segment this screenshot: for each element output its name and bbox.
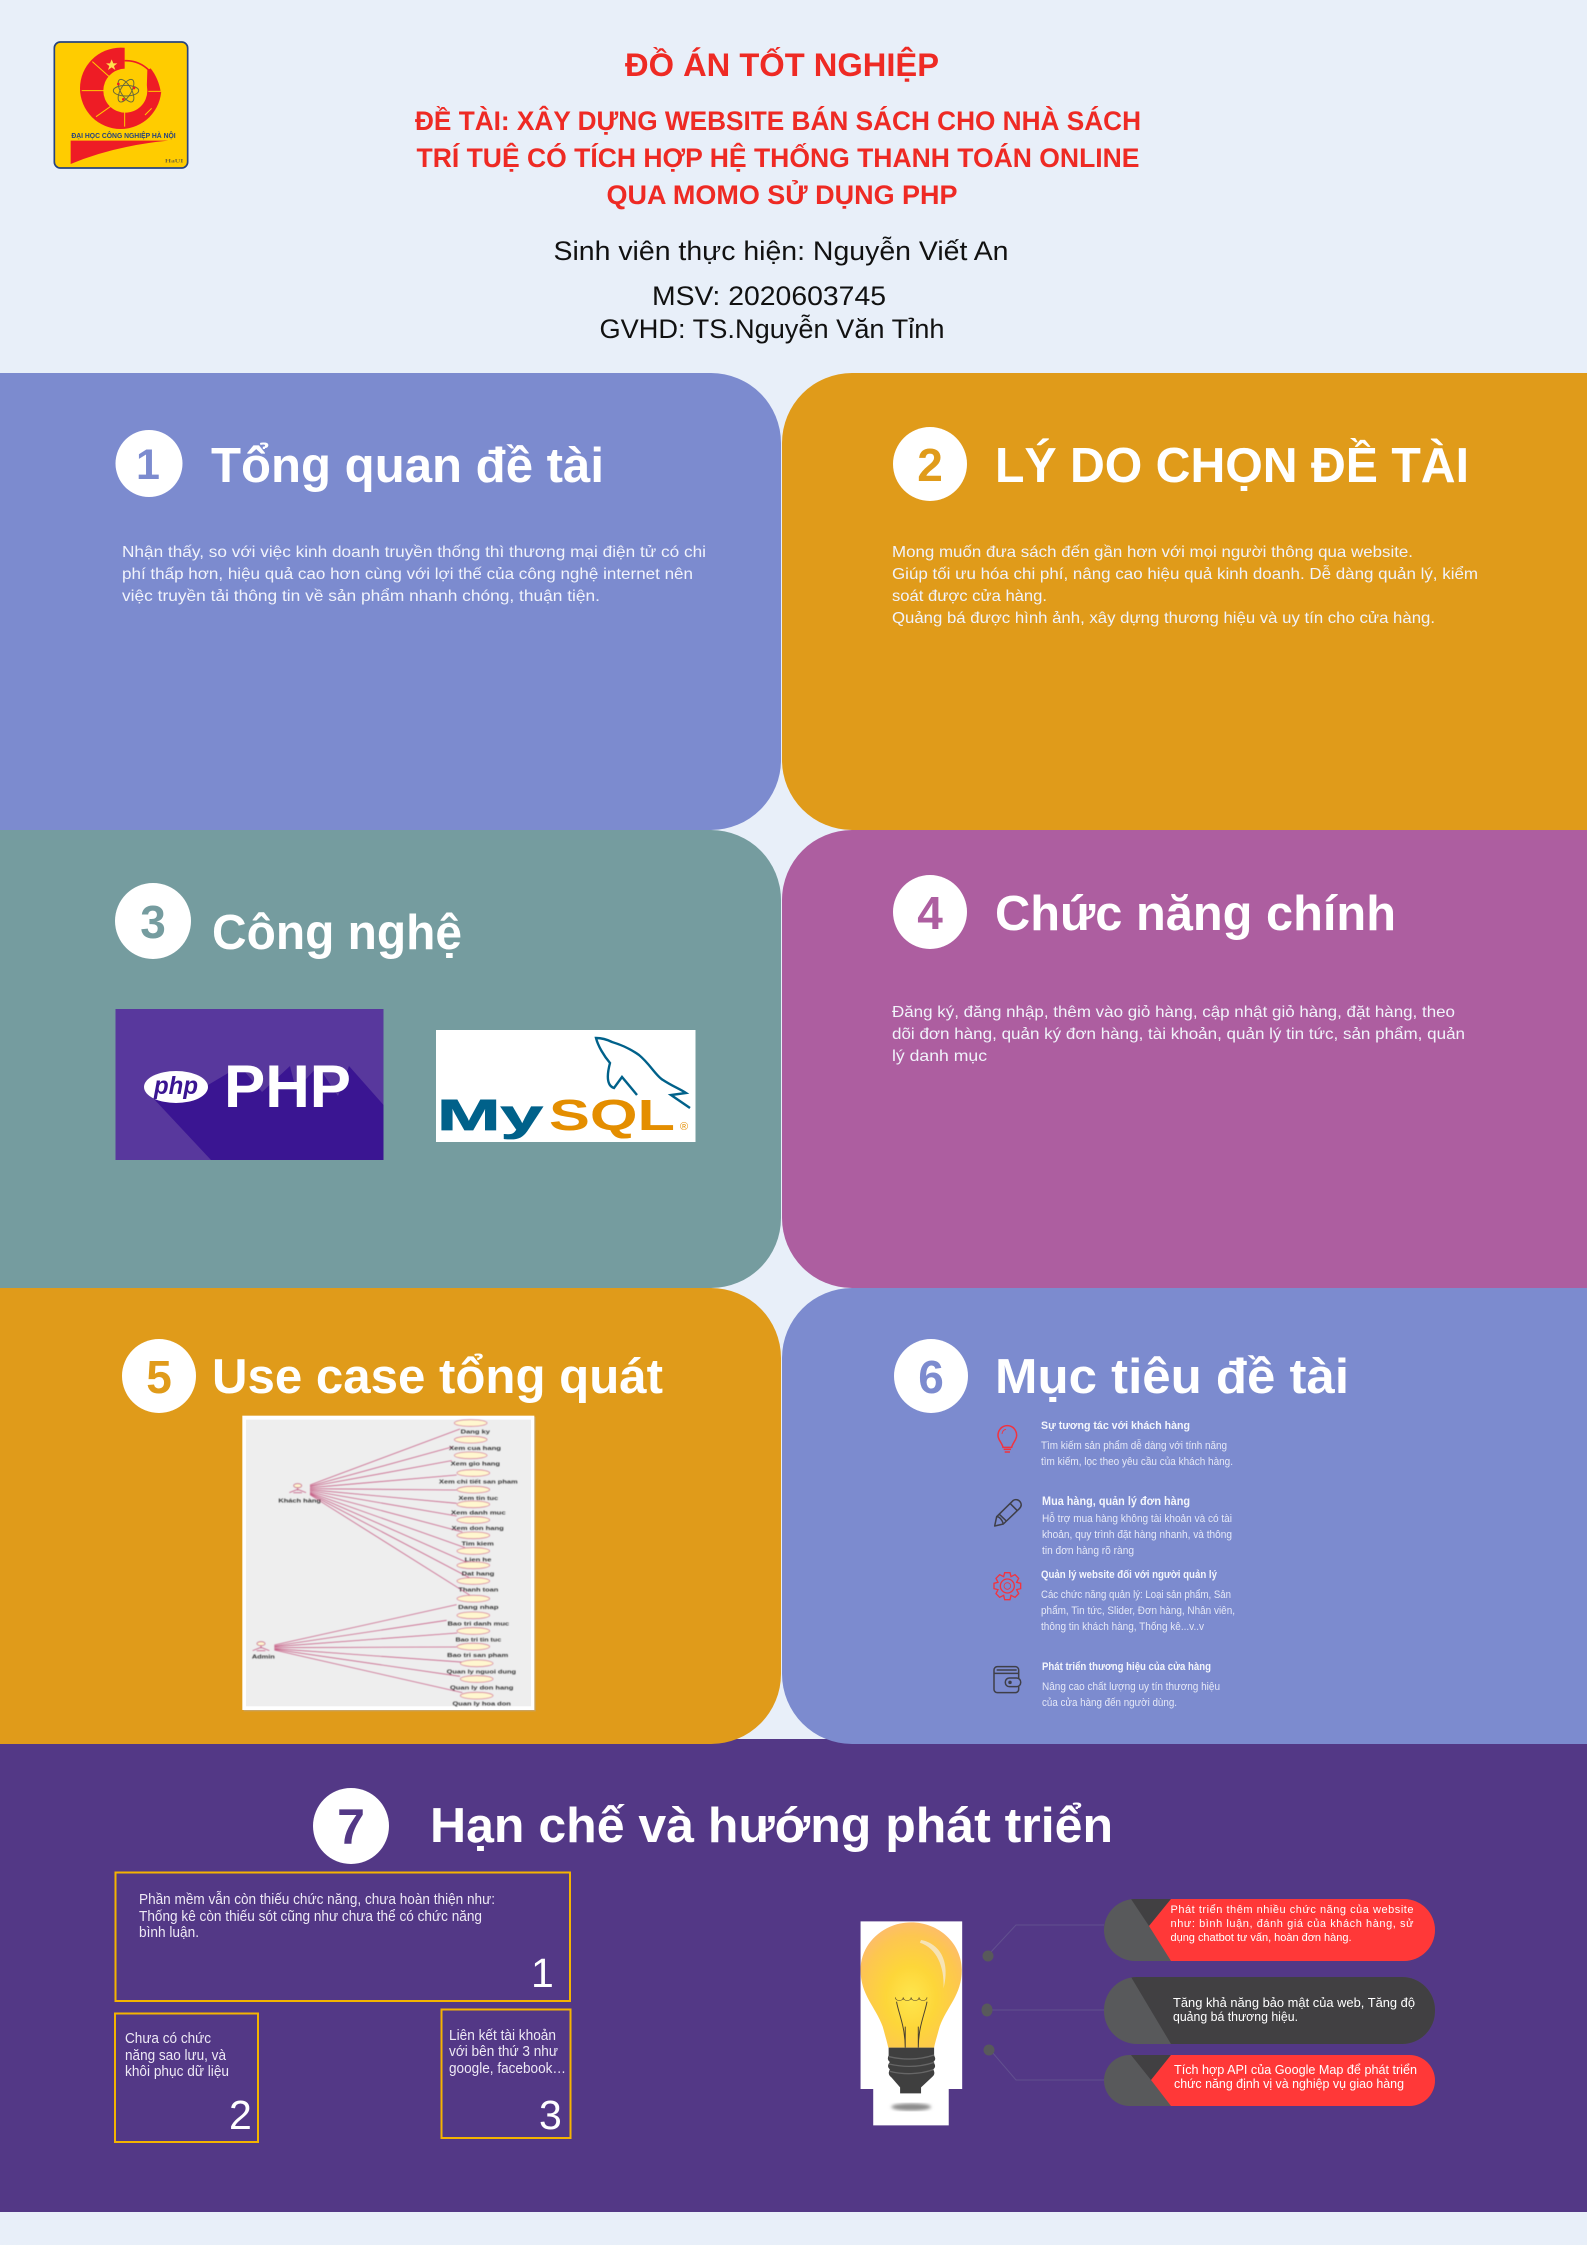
number badge 1 [116, 430, 182, 497]
connector lines and dots [982, 1925, 1104, 2080]
panel 7: Hạn chế và hướng phát triển [0, 1739, 1587, 2212]
item 1 text [1041, 1420, 1233, 1468]
limitation box 3: google, facebook… [449, 2060, 566, 2077]
limitation box 1 [116, 1872, 570, 2001]
number badge 4 [893, 875, 967, 949]
body text: dõi đơn hàng, quản ký đơn hàng, tài khoản, quản lý tin tức, sản phẩm, quản [892, 1025, 1465, 1043]
use case diagram [242, 1416, 536, 1711]
PHP logo [116, 1009, 384, 1160]
panel 6: Mục tiêu đề tài [782, 1288, 1587, 1744]
pill 1: future work: dụng chatbot tư vấn, hoàn đơn hàng. [1170, 1932, 1352, 1944]
use case diagram: Dat hang [462, 1572, 494, 1578]
use case diagram: Dang ky [461, 1429, 490, 1435]
use case diagram: Bao tri san pham [447, 1653, 509, 1659]
panel 1: Tổng quan đề tài [0, 373, 781, 830]
panel 4: Chức năng chính [782, 830, 1587, 1288]
heading: Use case tổng quát: Use case tổng quát [212, 1350, 663, 1404]
item 2 text [1042, 1494, 1232, 1557]
item 3 text: phẩm, Tin tức, Slider, Đơn hàng, Nhân viên, [1041, 1605, 1235, 1617]
number badge 5: 5 [146, 1351, 172, 1403]
heading: Công nghệ: Công nghệ [212, 906, 462, 960]
use case diagram: Dang nhap [458, 1605, 500, 1611]
body text [122, 544, 706, 605]
use case diagram: Khách hàng [278, 1498, 321, 1504]
item 2 text: khoản, quy trình đặt hàng nhanh, và thông [1042, 1529, 1232, 1541]
MySQL logo: SQL [549, 1091, 675, 1140]
student and supervisor info: MSV: 2020603745 [652, 281, 886, 311]
icon: wallet [994, 1667, 1021, 1693]
PHP logo: php [153, 1072, 198, 1100]
icon: light bulb [998, 1426, 1017, 1452]
pill 1: future work: Phát triển thêm nhiều chức năng của website [1170, 1904, 1414, 1916]
limitation box 1: bình luận. [139, 1924, 199, 1941]
panel 3: Công nghệ [0, 830, 781, 1288]
item 3 text: thông tin khách hàng, Thống kê...v..v [1041, 1621, 1204, 1633]
limitation box 3: với bên thứ 3 như [449, 2043, 558, 2060]
body text: việc truyền tải thông tin về sản phẩm nhanh chóng, thuận tiện. [122, 587, 600, 605]
panel 2: Lý do chọn đề tài [782, 373, 1587, 830]
use case diagram: Xem chi tiết san pham [439, 1478, 518, 1485]
use case diagram: Bao tri tin tuc [455, 1637, 501, 1643]
number badge 1: 1 [136, 441, 160, 489]
item 1 text: Tìm kiếm sản phẩm dễ dàng với tính năng [1041, 1439, 1227, 1452]
body text [892, 544, 1478, 627]
use case diagram: Xem tin tuc [458, 1496, 498, 1502]
MySQL logo: ® [680, 1121, 688, 1133]
MySQL logo [436, 1030, 696, 1142]
use case diagram: Xem cua hang [449, 1446, 501, 1452]
number badge 5 [122, 1339, 196, 1413]
pill 2: future work: quảng bá thương hiệu. [1173, 2009, 1298, 2024]
body text: Quảng bá được hình ảnh, xây dựng thương hiệu và uy tín cho cửa hàng. [892, 610, 1435, 627]
number badge 2: 2 [917, 439, 943, 491]
body text: phí thấp hơn, hiệu quả cao hơn cùng với lợi thế của công nghệ internet nên [122, 566, 693, 583]
pill 1: future work [1104, 1899, 1440, 1961]
limitation box 2: Chưa có chức [125, 2030, 211, 2047]
limitation box 3: Liên kết tài khoản [449, 2027, 556, 2044]
panel 5: Use case tổng quát [0, 1288, 781, 1744]
number badge 7 [313, 1788, 389, 1864]
use case diagram: Xem gio hang [451, 1461, 500, 1467]
heading: Mục tiêu đề tài: Mục tiêu đề tài [995, 1350, 1349, 1404]
item 3 text [1041, 1569, 1235, 1633]
use case diagram: Tim kiem [461, 1542, 494, 1548]
number badge 7: 7 [337, 1799, 365, 1855]
title [415, 47, 1141, 210]
PHP logo: PHP [224, 1053, 351, 1120]
number badge 4: 4 [917, 887, 943, 939]
number badge 6: 6 [918, 1351, 944, 1403]
item 4 text: của cửa hàng đến người dùng. [1042, 1697, 1177, 1709]
light bulb illustration [861, 1921, 962, 2125]
limitation box 2 [115, 2014, 258, 2142]
use case diagram: Thanh toan [458, 1587, 498, 1593]
limitation box 3: 3 [539, 2092, 562, 2138]
logo: Hanoi University of Industry: HaUI [165, 159, 183, 164]
limitation box 1: 1 [531, 1950, 554, 1996]
item 2 text: Hỗ trợ mua hàng không tài khoản và có tài [1042, 1512, 1232, 1525]
pill 3: future work [1104, 2055, 1440, 2106]
use case diagram: Quan ly don hang [450, 1685, 513, 1691]
item 2 text: Mua hàng, quản lý đơn hàng [1042, 1494, 1190, 1508]
MySQL logo: My [437, 1091, 544, 1140]
body text: lý danh mục [892, 1048, 987, 1065]
number badge 3: 3 [140, 896, 166, 948]
student and supervisor info: Sinh viên thực hiện: Nguyễn Viết An [554, 235, 1008, 266]
item 3 text: Các chức năng quản lý: Loại sản phẩm, Sản [1041, 1589, 1231, 1601]
student and supervisor info [554, 235, 1008, 344]
item 1 text: Sự tương tác với khách hàng [1041, 1420, 1190, 1432]
body text [892, 1004, 1465, 1065]
limitation box 2: khôi phục dữ liệu [125, 2063, 229, 2080]
use case diagram: Xem danh muc [451, 1510, 506, 1516]
use case diagram: Quan ly hoa don [452, 1702, 511, 1708]
limitation box 1: Thống kê còn thiếu sót cũng như chưa thể có chức năng [139, 1908, 482, 1925]
heading: Chức năng chính: Chức năng chính [995, 887, 1396, 941]
title: TRÍ TUỆ CÓ TÍCH HỢP HỆ THỐNG THANH TOÁN ONLINE [416, 141, 1140, 173]
item 4 text [1042, 1661, 1220, 1709]
item 1 text: tìm kiếm, lọc theo yêu cầu của khách hàng. [1041, 1456, 1233, 1468]
number badge 3 [115, 883, 191, 959]
number badge 2 [893, 427, 967, 501]
pill 2: future work [1104, 1977, 1440, 2044]
use case diagram: Quan ly nguoi dung [447, 1670, 516, 1676]
student and supervisor info: GVHD: TS.Nguyễn Văn Tỉnh [600, 313, 944, 344]
title: ĐỀ TÀI: XÂY DỰNG WEBSITE BÁN SÁCH CHO NHÀ SÁCH [415, 105, 1141, 136]
heading: Hạn chế và hướng phát triển: Hạn chế và hướng phát triển [430, 1799, 1113, 1853]
limitation box 3 [442, 2010, 570, 2138]
body text: Giúp tối ưu hóa chi phí, nâng cao hiệu quả kinh doanh. Dễ dàng quản lý, kiểm [892, 564, 1478, 583]
item 2 text: tin đơn hàng rõ ràng [1042, 1545, 1134, 1557]
title: QUA MOMO SỬ DỤNG PHP [606, 178, 958, 210]
body text: Nhận thấy, so với việc kinh doanh truyền thống thì thương mại điện tử có chi [122, 544, 706, 561]
item 4 text: Phát triển thương hiệu của cửa hàng [1042, 1661, 1211, 1673]
number badge 6 [894, 1339, 968, 1413]
logo: Hanoi University of Industry [54, 42, 188, 168]
icon: pencil [995, 1500, 1021, 1526]
logo: Hanoi University of Industry: ĐẠI HỌC CÔNG NGHIỆP HÀ NỘI [71, 131, 176, 140]
limitation box 2: 2 [229, 2092, 252, 2138]
use case diagram: Lien he [465, 1557, 491, 1563]
use case diagram: Xem don hang [451, 1526, 504, 1532]
limitation box 2: năng sao lưu, và [125, 2047, 227, 2064]
heading: Tổng quan đề tài: Tổng quan đề tài [211, 439, 604, 493]
pill 3: future work: Tích hợp API của Google Map để phát triển [1174, 2062, 1417, 2077]
pill 3: future work: chức năng định vị và nghiệp vụ giao hàng [1174, 2076, 1404, 2091]
limitation box 1: Phần mềm vẫn còn thiếu chức năng, chưa hoàn thiện như: [139, 1891, 495, 1908]
pill 2: future work: Tăng khả năng bảo mật của web, Tăng độ [1173, 1995, 1415, 2010]
body text: soát được cửa hàng. [892, 588, 1047, 605]
body text: Mong muốn đưa sách đến gần hơn với mọi người thông qua website. [892, 544, 1413, 561]
use case diagram: Admin [252, 1654, 275, 1660]
title: ĐỒ ÁN TỐT NGHIỆP [625, 47, 939, 83]
use case diagram: Bao tri danh muc [447, 1622, 509, 1628]
body text: Đăng ký, đăng nhập, thêm vào giỏ hàng, cập nhật giỏ hàng, đặt hàng, theo [892, 1004, 1455, 1021]
heading: LÝ DO CHỌN ĐỀ TÀI: LÝ DO CHỌN ĐỀ TÀI [995, 439, 1469, 493]
item 3 text: Quản lý website đối với người quản lý [1041, 1569, 1218, 1581]
icon: gear [994, 1573, 1021, 1600]
pill 1: future work: như: bình luận, đánh giá của khách hàng, sử [1170, 1918, 1414, 1930]
item 4 text: Nâng cao chất lượng uy tín thương hiệu [1042, 1681, 1220, 1693]
